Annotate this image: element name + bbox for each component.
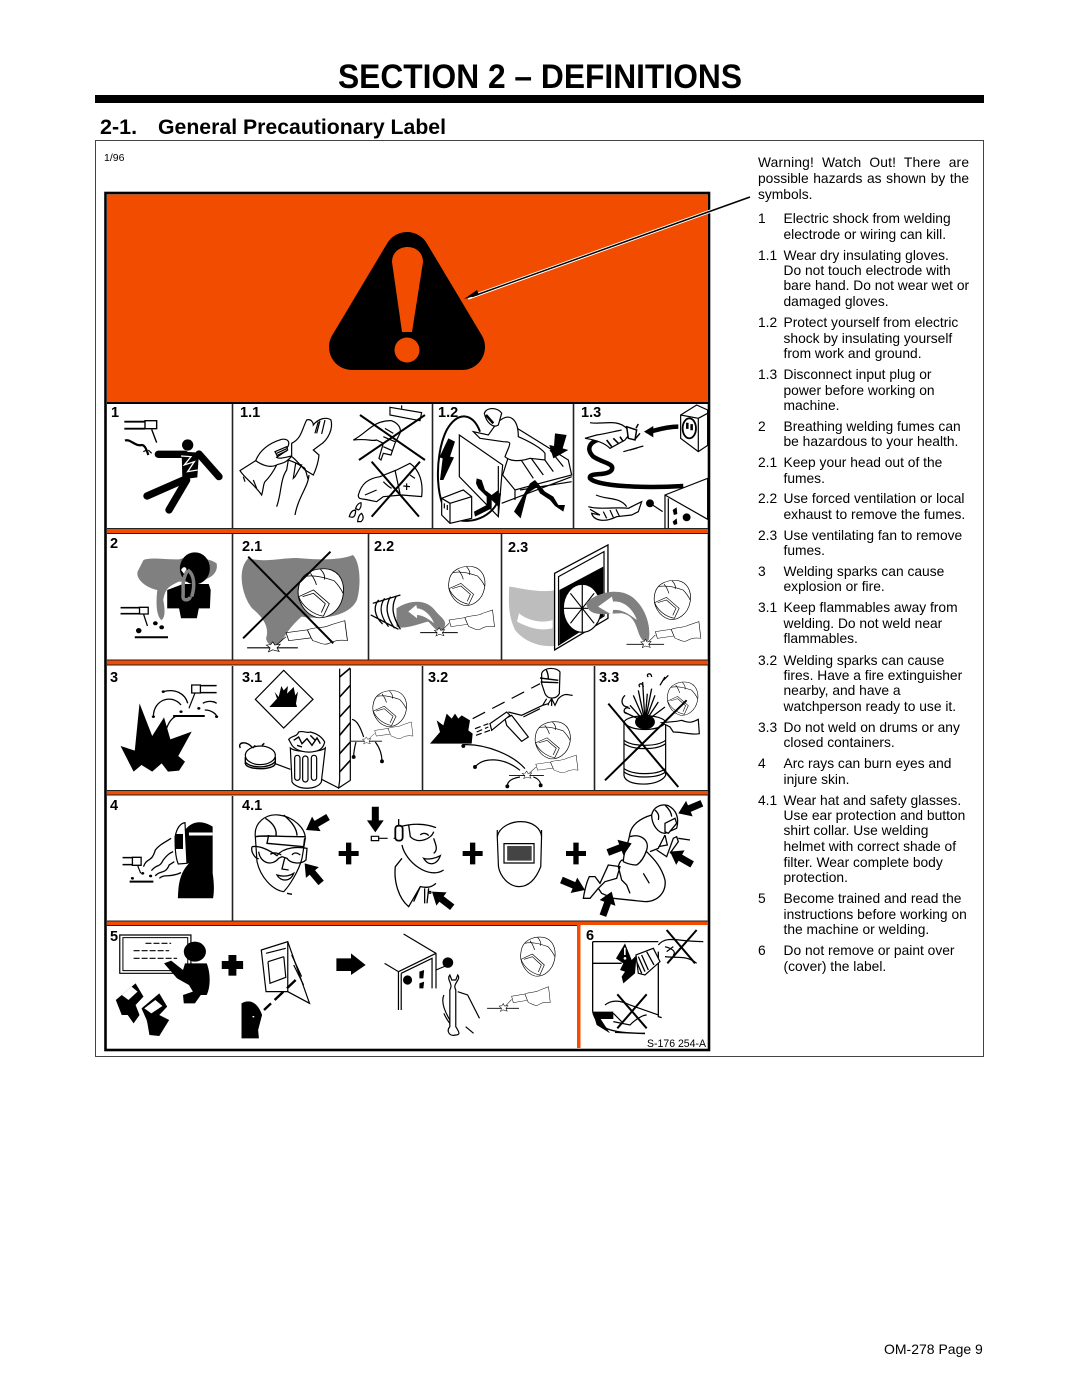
text block: hazard descriptions: Do not remove or paint over (784, 943, 955, 958)
plus sign (463, 843, 483, 864)
icon 4 graphic (123, 822, 214, 898)
text block: hazard descriptions: instructions before working on (784, 907, 967, 922)
text block: hazard descriptions: 3.2 (758, 653, 777, 668)
row 3 pictograms 3.2 and 3.3 (430, 668, 699, 788)
text block: hazard descriptions: protection. (784, 870, 848, 885)
panel number labels: 3 (110, 670, 118, 686)
text block: hazard descriptions: Use ear protection and button (784, 808, 965, 823)
panel number labels: 3.2 (428, 670, 448, 686)
icon 1: electric shock (124, 421, 219, 510)
plus sign (566, 843, 586, 864)
text block: hazard descriptions: possible hazards as shown by the (758, 171, 969, 186)
panel number labels: 1.1 (240, 405, 260, 421)
text block: hazard descriptions: Do not weld on drums or any (784, 720, 960, 735)
text block: hazard descriptions: flammables. (784, 631, 858, 646)
date code: 1/96 (104, 152, 125, 164)
text block: hazard descriptions: exhaust to remove the fumes. (784, 507, 965, 522)
complete body protection figure (558, 796, 705, 919)
icon 4.1: hat, glasses and ear protection (252, 807, 483, 914)
text block: hazard descriptions: Breathing welding fumes can (784, 419, 961, 434)
text block: hazard descriptions: (cover) the label. (784, 959, 886, 974)
text block: hazard descriptions: Protect yourself from electric (784, 315, 958, 330)
icon: warning triangle (352, 247, 462, 362)
plus sign (339, 843, 359, 864)
panel: warning label (106, 193, 750, 1050)
text block: hazard descriptions: injure skin. (784, 772, 849, 787)
text block: hazard descriptions: damaged gloves. (784, 294, 889, 309)
icon 2: fumes hazard (121, 552, 217, 637)
text block: hazard descriptions: 3 (758, 564, 766, 579)
text block: hazard descriptions: filter. Wear complete body (784, 855, 943, 870)
text block: hazard descriptions: the machine or welding. (784, 922, 929, 937)
text block: hazard descriptions: 2.2 (758, 491, 777, 506)
text block: hazard descriptions: closed containers. (784, 735, 895, 750)
text block: hazard descriptions: 5 (758, 891, 766, 906)
text block: hazard descriptions: welding. Do not weld near (782, 616, 943, 631)
panel number labels: 5 (110, 929, 118, 945)
text block: hazard descriptions: Do not touch electrode with (784, 263, 951, 278)
text block: hazard descriptions: Welding sparks can cause (784, 653, 945, 668)
text block: hazard descriptions: 3.1 (758, 600, 777, 615)
icon 4.1: welding helmet (497, 822, 542, 887)
row 1 pictograms 1.2 and 1.3 (438, 405, 708, 528)
text block: hazard descriptions: shirt collar. Use welding (784, 823, 928, 838)
text block: hazard descriptions: Wear dry insulating gloves. (784, 248, 949, 263)
row separators (107, 402, 708, 1048)
text block: hazard descriptions: power before working on (784, 383, 935, 398)
panel number labels: 4.1 (242, 798, 262, 814)
icon 5: training and instructions (116, 934, 555, 1038)
panel number labels: 3.3 (599, 670, 619, 686)
text block: hazard descriptions: electrode or wiring can kill. (784, 227, 946, 242)
orange warning header (107, 194, 708, 402)
text block: hazard descriptions: machine. (784, 398, 839, 413)
panel number labels: 3.1 (242, 670, 262, 686)
heading: 2-1. (100, 115, 137, 139)
text block: hazard descriptions: 1.1 (758, 248, 777, 263)
icon 2.2: forced ventilation (371, 566, 495, 636)
panel number labels: 2 (110, 536, 118, 552)
text block: hazard descriptions: Wear hat and safety glasses. (784, 793, 961, 808)
pointer arrow (464, 197, 750, 299)
text block: hazard descriptions: Become trained and read the (784, 891, 962, 906)
page footer: OM-278 Page 9 (884, 1341, 983, 1357)
icon 2.1: keep head out of fumes (242, 552, 360, 652)
text block: hazard descriptions: 1.3 (758, 367, 778, 382)
text block: hazard descriptions: symbols. (758, 187, 812, 202)
text block: hazard descriptions: 4.1 (758, 793, 777, 808)
icon 1.3: disconnect input plug (585, 405, 708, 528)
text block: hazard descriptions: from work and ground. (784, 346, 922, 361)
icon 2.3: ventilating fan (509, 545, 701, 650)
panel number labels: 1 (111, 405, 119, 421)
text block: hazard descriptions: fumes. (784, 543, 825, 558)
text block: hazard descriptions (758, 155, 970, 974)
text block: hazard descriptions: Use forced ventilation or local (784, 491, 964, 506)
text block: hazard descriptions: explosion or fire. (784, 579, 885, 594)
panel number labels: 1.3 (581, 405, 601, 421)
head with hat and safety glasses (252, 810, 332, 894)
icon 1.2: insulate from work and ground (438, 409, 572, 523)
panel number labels: 1.2 (438, 405, 458, 421)
text block: hazard descriptions: Electric shock from welding (784, 211, 951, 226)
panel number labels: 2.1 (242, 539, 262, 555)
text block: hazard descriptions: 2.1 (758, 455, 777, 470)
text block: hazard descriptions: 3.3 (758, 720, 778, 735)
text block: hazard descriptions: 2.3 (758, 528, 778, 543)
text block: hazard descriptions: fires. Have a fire extinguisher (784, 668, 963, 683)
profile head with ear protection and buttoned collar (367, 807, 457, 914)
icon 3 graphic (121, 685, 218, 772)
text block: hazard descriptions: 4 (758, 756, 766, 771)
row 1 pictograms 1 and 1.1 (124, 405, 425, 522)
text block: hazard descriptions: helmet with correct shade of (784, 839, 956, 854)
icon 3.3: do not weld on closed containers (605, 674, 699, 787)
icon 3.2: fire extinguisher watchperson (430, 668, 578, 788)
text block: hazard descriptions: 1 (758, 211, 766, 226)
panel number labels (110, 405, 619, 945)
heading: General Precautionary Label (158, 115, 446, 139)
text block: hazard descriptions: bare hand. Do not wear wet or (784, 278, 970, 293)
text block: hazard descriptions: 6 (758, 943, 766, 958)
panel number labels: 6 (586, 928, 594, 944)
icon 1.1: gloves (240, 405, 425, 522)
text block: hazard descriptions: Arc rays can burn eyes and (784, 756, 951, 771)
text block: hazard descriptions: nearby, and have a (784, 683, 901, 698)
text block: hazard descriptions: Keep flammables away from (784, 600, 958, 615)
text block: hazard descriptions: Warning! Watch Out! There are (758, 155, 969, 170)
icon 6: do not remove or paint over label (593, 930, 703, 1034)
icon 3: explosion, icon 4: arc rays, welding shield (121, 685, 542, 898)
panel number labels: 2.2 (374, 539, 394, 555)
title: SECTION 2 – DEFINITIONS (338, 58, 742, 96)
text block: hazard descriptions: Use ventilating fan to remove (784, 528, 963, 543)
text block: hazard descriptions: 2 (758, 419, 766, 434)
icon 3.1: keep flammables away (240, 668, 413, 788)
text block: hazard descriptions: watchperson ready to use it. (782, 699, 956, 714)
full body protection and icon 6 (558, 796, 705, 1034)
row 2 and left column pictograms (121, 545, 701, 652)
text block: hazard descriptions: fumes. (784, 471, 825, 486)
text block: hazard descriptions: Disconnect input plug or (784, 367, 932, 382)
panel number labels: 4 (110, 798, 118, 814)
text block: hazard descriptions: shock by insulating yourself (784, 331, 952, 346)
panel number labels: 2.3 (508, 540, 528, 556)
text block: hazard descriptions: be hazardous to your health. (784, 434, 958, 449)
text block: hazard descriptions: 1.2 (758, 315, 777, 330)
panel: precautionary label frame (96, 140, 984, 1056)
text block: hazard descriptions: Welding sparks can cause (784, 564, 945, 579)
part number: S-176 254-A (647, 1038, 707, 1050)
text block: hazard descriptions: Keep your head out of the (784, 455, 943, 470)
